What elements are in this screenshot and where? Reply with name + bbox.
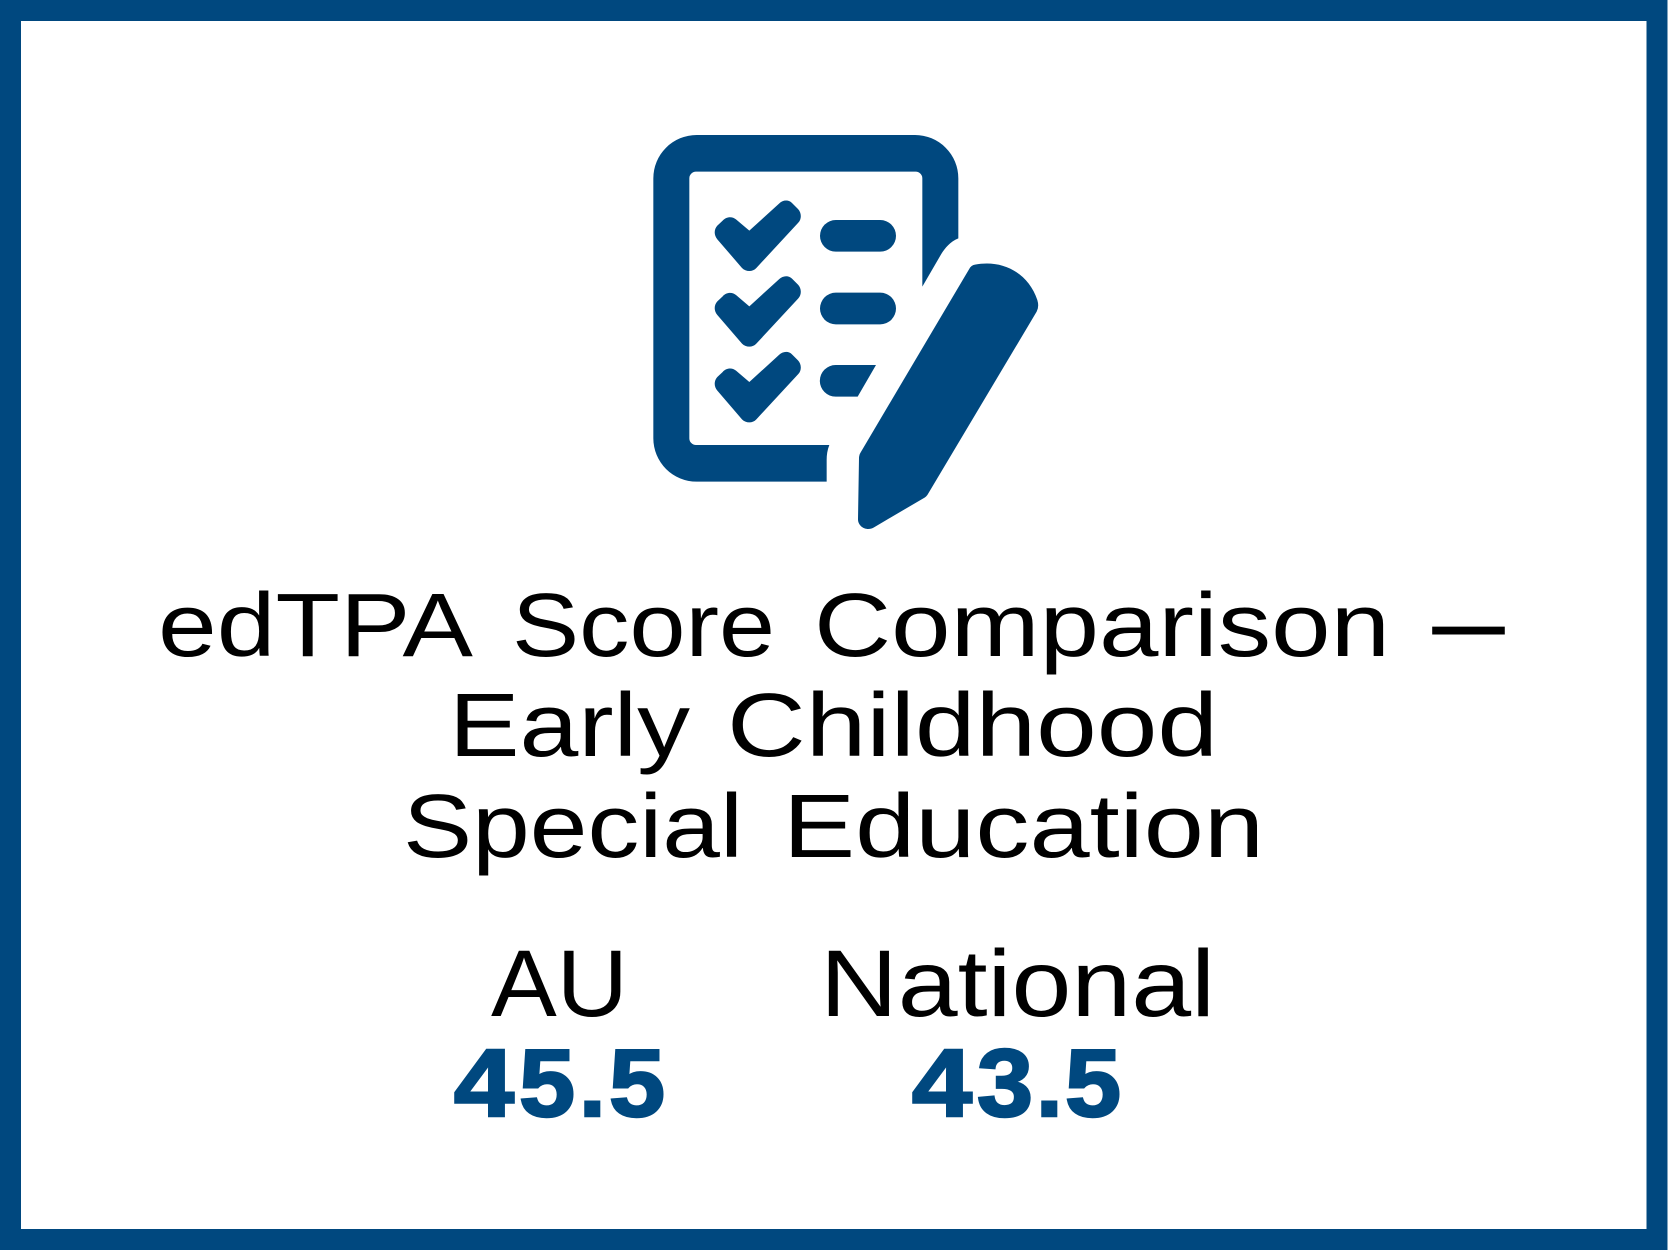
value: 45.5: 5: [519, 1030, 575, 1137]
title: Comparison: [814, 576, 1390, 676]
value: 43.5: 3: [977, 1030, 1033, 1137]
title: Early: [449, 676, 690, 776]
title: Education: [783, 777, 1264, 877]
icon: checkmarks: [715, 201, 801, 422]
comparison: AU score: [454, 931, 665, 1137]
title: Childhood: [727, 676, 1218, 776]
icon: document outline: [653, 135, 958, 482]
title: Special: [403, 777, 743, 877]
value: 45.5: 4: [454, 1030, 514, 1137]
value: 43.5: 5: [1065, 1030, 1121, 1137]
title: Score: [512, 576, 775, 676]
title: edTPA: [158, 576, 473, 676]
value: 45.5: .: [579, 1030, 606, 1137]
value: 45.5: 5: [609, 1030, 665, 1137]
icon: list lines: [820, 220, 896, 397]
comparison: National score: [820, 931, 1215, 1137]
value: 45.5: [454, 1030, 665, 1137]
value: 43.5: .: [1036, 1030, 1063, 1137]
label: National: National: [820, 931, 1215, 1037]
icon: checklist with pencil: [653, 135, 1038, 529]
label: AU: AU: [491, 931, 628, 1037]
title: [158, 573, 1504, 877]
icon: pencil: [858, 264, 1038, 529]
value: 43.5: 4: [912, 1030, 972, 1137]
title: —: [1433, 573, 1504, 672]
value: 43.5: [912, 1030, 1121, 1137]
